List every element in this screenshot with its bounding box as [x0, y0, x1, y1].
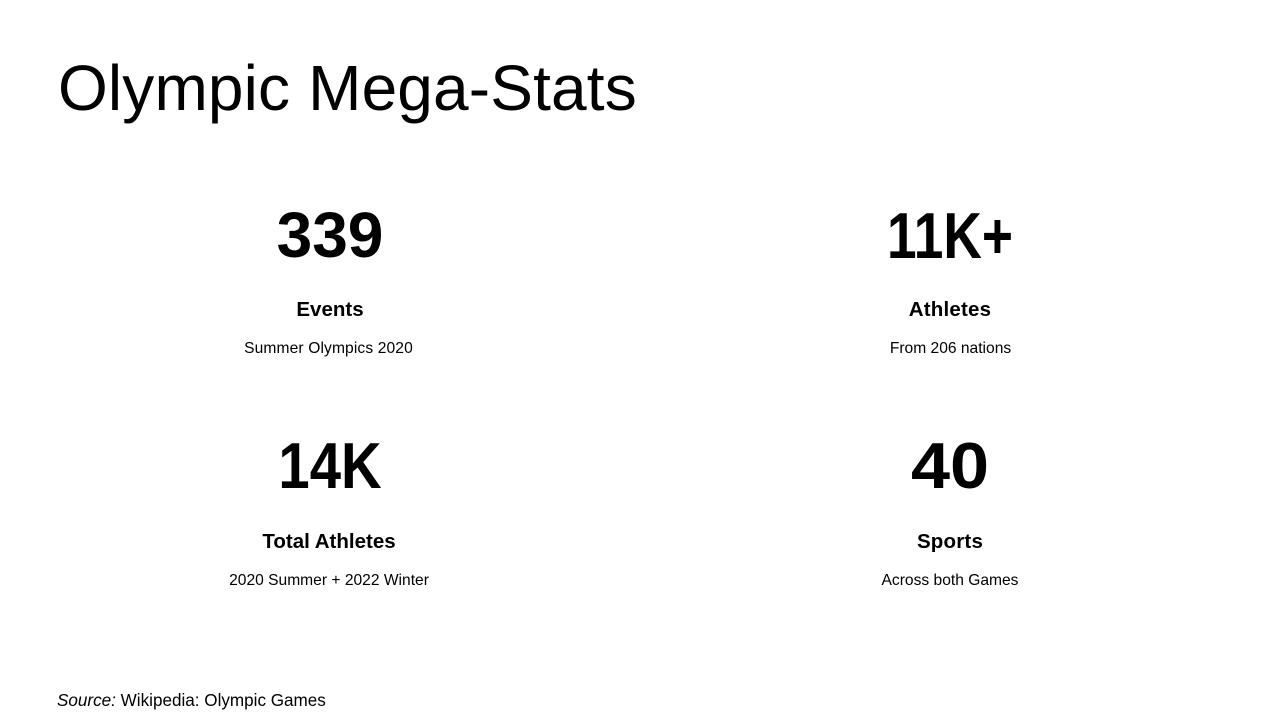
stat: total athletes — [229, 429, 429, 589]
stat: events — [244, 199, 413, 357]
label: total athletes: Total Athletes — [262, 530, 396, 553]
label: events: Events — [296, 298, 364, 321]
number: 339: 339 — [277, 199, 383, 271]
description: athletes: From 206 nations — [890, 340, 1011, 357]
description: total athletes: 2020 Summer + 2022 Winter — [229, 572, 429, 589]
label: athletes: Athletes — [909, 298, 991, 321]
label: sports: Sports — [917, 530, 983, 553]
description: sports: Across both Games — [882, 572, 1018, 589]
number: 11K+: 11K+ — [887, 199, 1013, 272]
description: events: Summer Olympics 2020 — [244, 340, 413, 357]
number: 40: 40 — [911, 429, 989, 502]
stat: sports — [882, 429, 1018, 589]
title: Olympic Mega-Stats — [58, 52, 637, 124]
source note: Source: Wikipedia: Olympic Games — [57, 691, 326, 710]
number: 14K: 14K — [278, 429, 382, 502]
stat: athletes — [887, 199, 1013, 357]
